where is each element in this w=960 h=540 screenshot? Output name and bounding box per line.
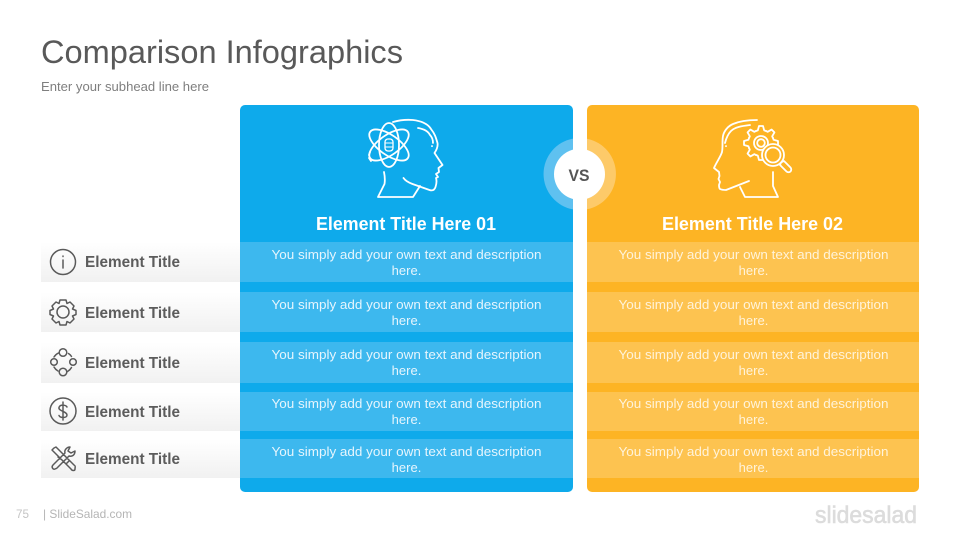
row 4 description: You simply add your own text and description — [272, 396, 542, 411]
row 5: tools: Element Title — [85, 451, 180, 468]
row 2 description — [240, 292, 573, 332]
panel heading 01: Element Title Here 01 — [316, 213, 496, 234]
subhead: Enter your subhead line here — [41, 79, 209, 94]
row 2 description: here. — [392, 313, 421, 328]
row 1 description: You simply add your own text and description — [272, 247, 542, 262]
title: Comparison Infographics — [41, 34, 403, 70]
row 3 description: You simply add your own text and description — [618, 347, 888, 362]
logo: slidesalad: slidesalad — [815, 502, 917, 529]
row 1: information: Element Title — [85, 254, 180, 271]
panel: blue element 01 — [240, 105, 573, 492]
row 2 description — [587, 292, 919, 332]
panel: orange element 02 — [587, 105, 919, 492]
row 1 description: here. — [739, 263, 768, 278]
row 4: dollar: Element Title — [85, 404, 180, 421]
row 5 description: You simply add your own text and description — [618, 444, 888, 459]
row 5 description: here. — [739, 460, 768, 475]
footer: page number: 75 — [16, 507, 29, 521]
row 3 description — [240, 342, 573, 383]
icon: head with atom — [364, 120, 442, 197]
row 4 description — [587, 392, 919, 431]
row 3 description — [587, 342, 919, 383]
row 4 description — [240, 392, 573, 431]
row 2 description: You simply add your own text and description — [272, 297, 542, 312]
row 2 description: here. — [739, 313, 768, 328]
row 1 description: here. — [392, 263, 421, 278]
row 5 description — [240, 439, 573, 478]
row 3: network — [41, 342, 240, 383]
row 3 description: here. — [392, 363, 421, 378]
vs badge: VS — [568, 167, 590, 185]
icon: head with gear and magnifier — [714, 120, 791, 197]
row 4 description: here. — [392, 412, 421, 427]
vs badge — [544, 139, 616, 209]
footer: source: | SlideSalad.com — [43, 507, 132, 521]
row 3 description: here. — [739, 363, 768, 378]
row 4: dollar — [41, 392, 240, 431]
row 1 description — [587, 242, 919, 282]
row 3 description: You simply add your own text and description — [272, 347, 542, 362]
row 2 description: You simply add your own text and description — [618, 297, 888, 312]
row 3: network: Element Title — [85, 355, 180, 372]
row 4 description: You simply add your own text and description — [618, 396, 888, 411]
panel heading 02: Element Title Here 02 — [662, 213, 843, 234]
row 1: information — [41, 242, 240, 282]
row 1 description: You simply add your own text and description — [618, 247, 888, 262]
row 1 description — [240, 242, 573, 282]
row 5 description: You simply add your own text and description — [272, 444, 542, 459]
row 5 description — [587, 439, 919, 478]
row 5 description: here. — [392, 460, 421, 475]
row 5: tools — [41, 439, 240, 478]
row 2: settings — [41, 292, 240, 332]
row 4 description: here. — [739, 412, 768, 427]
row 2: settings: Element Title — [85, 305, 180, 322]
panel: left row labels — [41, 242, 240, 478]
